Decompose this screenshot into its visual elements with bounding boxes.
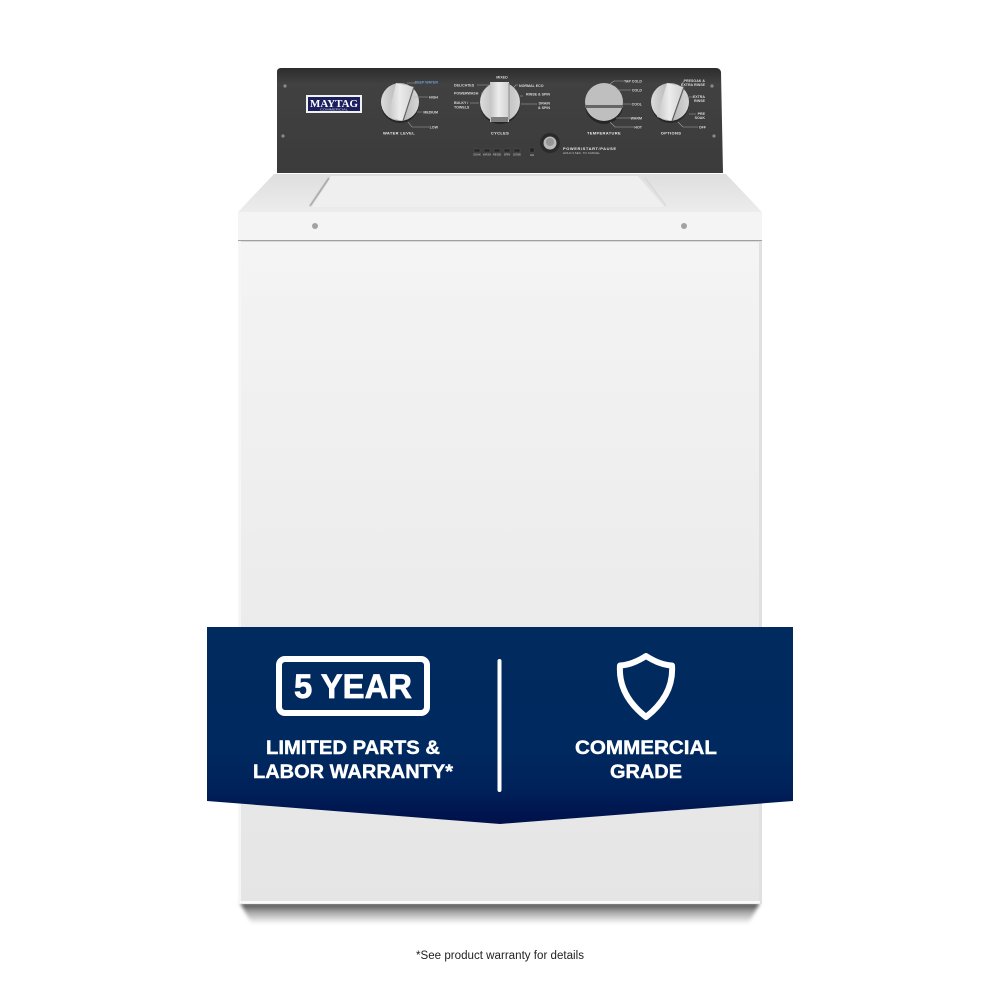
commercial grade text: COMMERCIAL <box>575 738 717 759</box>
warranty badge: 5 YEAR <box>294 668 412 706</box>
icon: shield <box>620 656 672 717</box>
dial: water level <box>381 83 419 123</box>
dial labels: LOW <box>430 126 439 130</box>
warranty text <box>253 738 454 783</box>
status lights: RINSE <box>493 152 501 156</box>
warranty text: LIMITED PARTS & <box>266 738 440 759</box>
washer <box>238 68 762 924</box>
status lights: SOAK <box>473 152 481 156</box>
dial titles: WATER LEVEL <box>383 130 415 136</box>
dial: cycles <box>480 82 520 124</box>
dial: temperature <box>585 83 623 124</box>
divider <box>498 659 502 792</box>
footnote: *See product warranty for details <box>416 950 584 962</box>
dial titles: CYCLES <box>491 130 509 136</box>
dial labels: & SPIN <box>538 106 550 110</box>
dial labels: DEEP WATER <box>415 80 438 84</box>
warranty badge <box>279 659 427 713</box>
commercial grade text <box>575 738 717 783</box>
floor shadow <box>240 903 760 924</box>
control panel <box>277 68 723 173</box>
dial labels: PRE <box>698 112 706 116</box>
brand logo <box>306 95 362 113</box>
panel screws <box>281 84 716 138</box>
dial labels: RINSE <box>694 99 706 103</box>
dial titles: TEMPERATURE <box>587 130 621 136</box>
dial labels: COLD <box>632 88 642 92</box>
brand logo: MAYTAG <box>310 99 358 110</box>
dial labels: DRAIN <box>539 102 550 106</box>
status lights: SPIN <box>504 152 510 156</box>
power button: POWER/START/PAUSE <box>563 146 616 151</box>
warranty text: LABOR WARRANTY* <box>253 762 454 783</box>
dial titles <box>383 130 681 136</box>
dial labels: POWERWASH <box>454 92 479 96</box>
dial labels: TAP COLD <box>624 80 642 84</box>
dial labels: HOT <box>634 126 643 130</box>
commercial grade text: GRADE <box>610 762 682 783</box>
dial titles: OPTIONS <box>661 130 681 136</box>
brand logo: COMMERCIAL <box>320 108 348 112</box>
dial labels: MIXED <box>496 76 508 80</box>
cabinet body <box>238 241 762 904</box>
screw left <box>312 223 318 229</box>
dial labels: OFF <box>699 126 707 130</box>
power button: HOLD 3 SEC. TO CANCEL <box>563 151 600 155</box>
screw right <box>681 223 687 229</box>
power button <box>540 133 616 155</box>
dial labels: EXTRA <box>693 95 705 99</box>
status lights <box>473 148 534 157</box>
top deck <box>238 174 762 212</box>
dial labels: SOAK <box>695 116 705 120</box>
status lights: LID <box>530 153 534 157</box>
dial leader lines <box>407 81 698 127</box>
dial labels: DELICATES <box>454 84 475 88</box>
dial labels: MEDIUM <box>423 110 438 114</box>
dial labels: WARM <box>631 116 642 120</box>
status lights: WASH <box>483 152 491 156</box>
dial labels: HIGH <box>429 96 438 100</box>
dial labels: TOWELS <box>454 106 470 110</box>
dial labels: PRESOAK & <box>684 79 705 83</box>
dial labels: NORMAL ECO <box>519 84 544 88</box>
lid <box>310 176 666 207</box>
dial labels: RINSE & SPIN <box>526 92 550 96</box>
banner <box>207 627 793 824</box>
dial labels: BULKY / <box>454 101 468 105</box>
cabinet front band <box>238 212 762 240</box>
status lights: DONE <box>513 152 521 156</box>
dial labels: COOL <box>632 102 643 106</box>
dial labels <box>415 76 707 130</box>
dial: options <box>651 83 689 123</box>
dial labels: EXTRA RINSE <box>681 83 706 87</box>
